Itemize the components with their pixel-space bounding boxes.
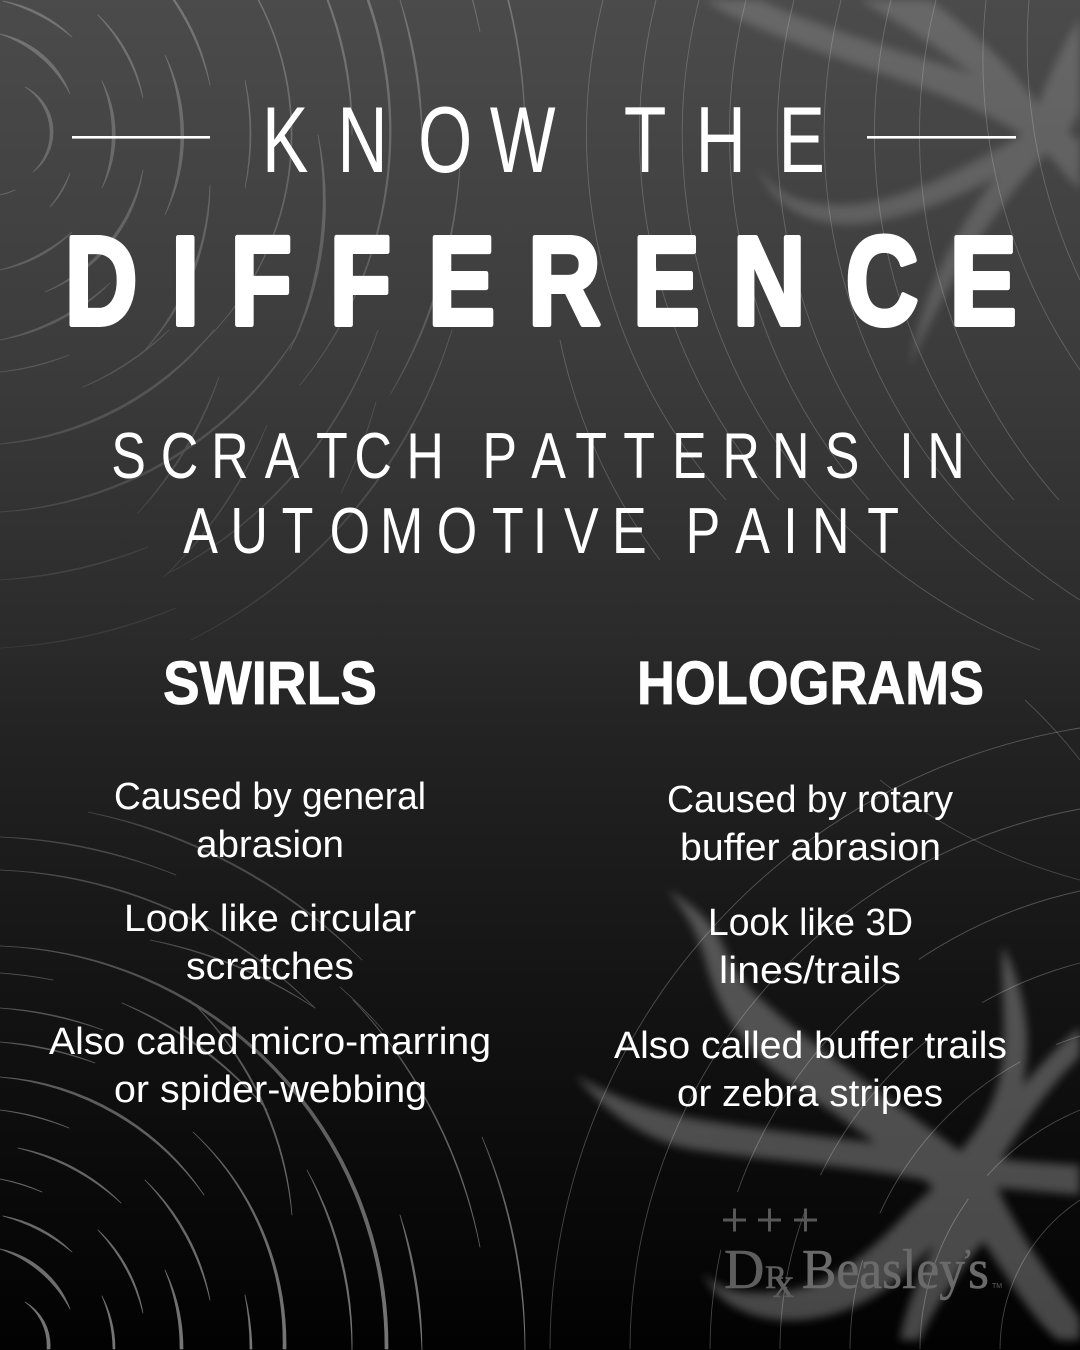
subtitle line 1: SCRATCH PATTERNS IN xyxy=(111,421,965,492)
swirl scratch pattern xyxy=(0,0,525,1350)
heading: KNOW THE: KNOW THE xyxy=(262,87,825,192)
swirls text: cause xyxy=(114,776,426,866)
logo: Dr Beasley's: TM xyxy=(992,1283,1002,1290)
title rule: left xyxy=(72,136,210,139)
holograms text: cause: Caused by rotary xyxy=(667,779,953,821)
swirls text: look xyxy=(124,898,416,988)
logo: Dr Beasley's: Beasley xyxy=(802,1239,965,1301)
logo: Dr Beasley's xyxy=(723,1208,1002,1307)
subtitle line 2: AUTOMOTIVE PAINT xyxy=(183,496,899,567)
swirls text: aliases: Also called micro-marring xyxy=(49,1021,491,1063)
holograms text: look xyxy=(708,902,913,992)
column heading: swirls: SWIRLS xyxy=(163,649,377,717)
hologram hairline trails: bottom xyxy=(550,728,1080,1349)
swirls text: aliases: or spider-webbing xyxy=(114,1069,427,1111)
swirls text: look: Look like circular xyxy=(124,898,416,940)
holograms text: look: Look like 3D xyxy=(708,902,913,944)
heading: DIFFERENCE: DIFFERENCE xyxy=(65,212,1017,352)
logo: Dr Beasley's: D xyxy=(724,1239,764,1301)
holograms text: cause: buffer abrasion xyxy=(680,827,941,869)
logo: Dr Beasley's: s xyxy=(968,1239,989,1301)
swirls text: look: scratches xyxy=(186,946,354,988)
title rule: right xyxy=(867,136,1016,139)
holograms text: aliases xyxy=(614,1025,1007,1115)
swirls text: cause: abrasion xyxy=(196,824,344,866)
holograms text: cause xyxy=(667,779,953,869)
holograms text: look: lines/trails xyxy=(719,950,901,992)
column heading: holograms: HOLOGRAMS xyxy=(637,649,984,717)
logo: Dr Beasley's: R xyxy=(765,1260,787,1296)
logo: Dr Beasley's: x xyxy=(773,1261,794,1307)
holograms text: aliases: or zebra stripes xyxy=(677,1073,943,1115)
hologram hairline trails: top xyxy=(560,0,1080,880)
logo: Dr Beasley's: ’ xyxy=(962,1243,973,1280)
swirls text: cause: Caused by general xyxy=(114,776,426,818)
hologram star: top right xyxy=(705,0,1080,368)
swirls text: aliases xyxy=(49,1021,491,1111)
holograms text: aliases: Also called buffer trails xyxy=(614,1025,1007,1067)
hologram star: bottom right xyxy=(576,889,1080,1340)
